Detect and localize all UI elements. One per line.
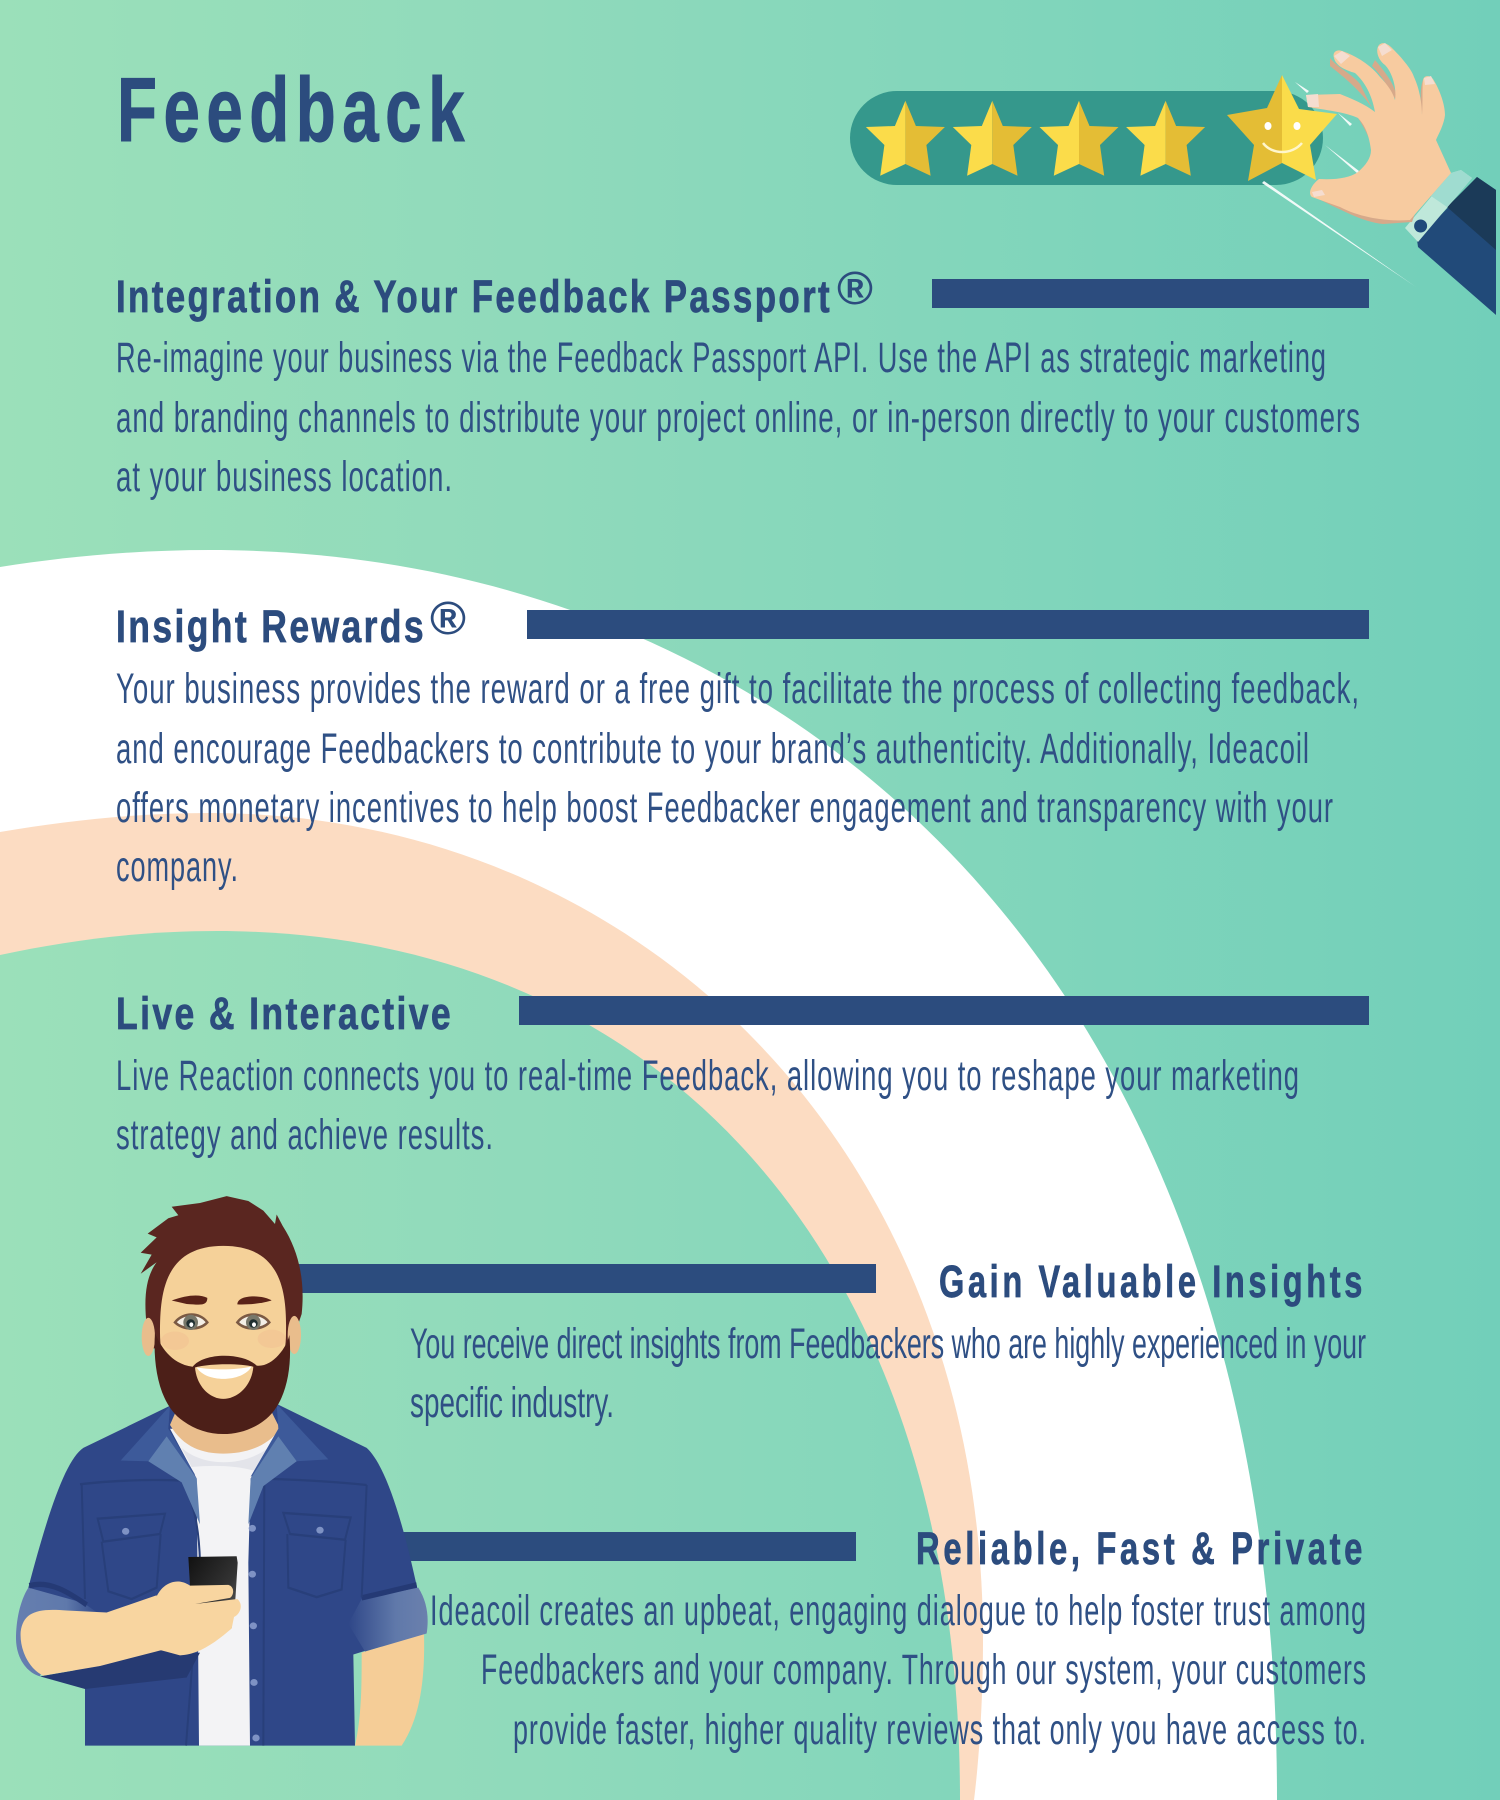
section: Integration and Your Feedback Passport: [116, 262, 1369, 501]
body text: company.: [116, 843, 239, 891]
decorative arcs: [0, 550, 1277, 1800]
shirt: [28, 1404, 427, 1746]
section: Live and Interactive: [116, 988, 1369, 1159]
ears: [142, 1316, 301, 1356]
illustration: bearded man holding phone: [16, 1196, 428, 1746]
bar: [402, 1532, 856, 1561]
star 1: [866, 101, 945, 176]
illustration: rating bar and hand: [850, 43, 1496, 315]
arm shadow: [40, 1649, 200, 1689]
bar: [932, 279, 1369, 308]
body text: [430, 1587, 1367, 1754]
neck: [170, 1402, 280, 1454]
sleeve: [1417, 177, 1496, 315]
body text: [410, 1320, 1366, 1427]
registered mark: ®: [430, 592, 466, 644]
right forearm: [355, 1633, 424, 1746]
cuff: [1405, 170, 1472, 242]
face: [160, 1246, 286, 1417]
motion lines: [1262, 82, 1416, 287]
cheeks: [161, 1330, 286, 1350]
collars: [121, 1404, 328, 1524]
body text: [116, 334, 1361, 501]
section: Insight Rewards: [116, 592, 1369, 891]
star 4: [1126, 101, 1205, 176]
star 3: [1040, 101, 1118, 176]
rating pill: [850, 91, 1323, 185]
bar: [527, 610, 1369, 639]
bar: [519, 996, 1369, 1025]
star 2: [953, 101, 1032, 176]
beard: [155, 1333, 290, 1434]
shirt details: [80, 1479, 367, 1746]
title: Feedback: [117, 60, 471, 161]
smiling star: [1227, 75, 1337, 181]
bar: [290, 1264, 876, 1293]
heading: Insight Rewards: [116, 601, 426, 652]
eyes: [175, 1315, 269, 1330]
heading: Integration & Your Feedback Passport: [116, 271, 832, 322]
body text: specific industry.: [410, 1379, 614, 1427]
hand on phone: [155, 1581, 241, 1655]
body text: [116, 1052, 1300, 1159]
mouth: [195, 1364, 253, 1399]
eyebrows: [172, 1296, 272, 1305]
registered mark: ®: [837, 262, 873, 314]
left arm: [21, 1595, 167, 1676]
t-shirt: [170, 1429, 280, 1746]
hand: [1306, 43, 1451, 224]
buttons: [122, 1525, 324, 1741]
body text: [116, 665, 1360, 891]
phone: [188, 1556, 238, 1628]
right cuff: [348, 1588, 428, 1651]
body text: strategy and achieve results.: [116, 1111, 494, 1159]
beard and hair back: [141, 1196, 303, 1348]
heading: Live & Interactive: [116, 988, 453, 1039]
left cuff: [16, 1588, 100, 1676]
section: Reliable, Fast and Private: [402, 1523, 1367, 1754]
section: Gain Valuable Insights: [290, 1256, 1366, 1427]
body text: at your business location.: [116, 453, 453, 501]
